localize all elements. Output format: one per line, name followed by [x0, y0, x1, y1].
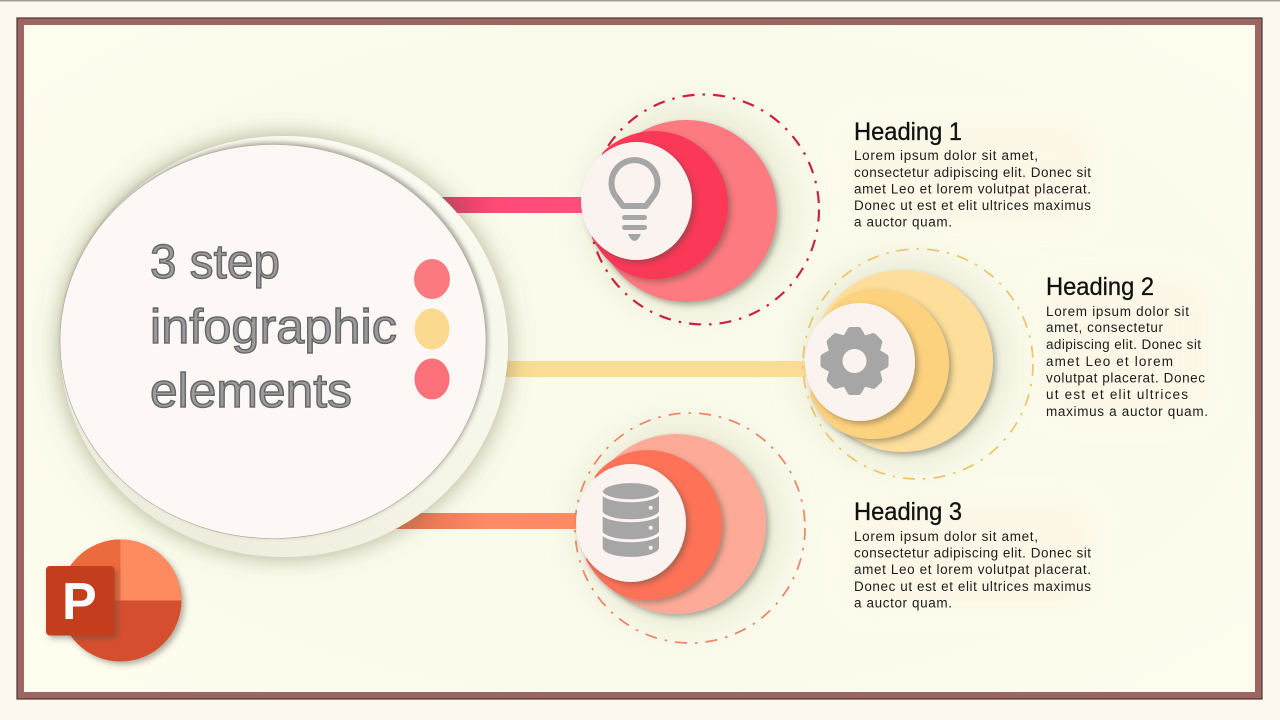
text block: heading 1: Heading 1 [854, 118, 962, 146]
icon: database [602, 483, 660, 557]
text block: heading 2: amet, consectetur [1046, 320, 1164, 335]
title: infographic [150, 301, 397, 354]
text block: heading 3 [854, 498, 1091, 610]
icon: gear [820, 327, 888, 395]
text block: heading 2: ut est et elit ultrices [1046, 387, 1188, 402]
text block: heading 1: Donec ut est et elit ultrices maximus [854, 198, 1091, 213]
text block: heading 1 [854, 118, 1091, 230]
text block: heading 3: a auctor quam. [854, 596, 952, 610]
text block: heading 1: amet Leo et lorem volutpat placerat. [854, 182, 1091, 196]
text block: heading 2: adipiscing elit. Donec sit [1046, 337, 1201, 352]
main circle [60, 136, 508, 557]
text block: heading 2: maximus a auctor quam. [1046, 404, 1208, 419]
step 1 circles [581, 94, 819, 324]
title: elements [150, 365, 352, 418]
text block: heading 3: consectetur adipiscing elit. Donec sit [854, 546, 1091, 560]
step indicator dots [414, 259, 450, 400]
icon: light bulb [612, 160, 657, 241]
text block: heading 3: Heading 3 [854, 498, 962, 526]
connector bar: pink [440, 197, 582, 213]
text block: heading 2 [1046, 273, 1208, 419]
warm glow behind text blocks [850, 125, 1205, 605]
icon: PowerPoint logo [46, 540, 182, 662]
text block: heading 1: a auctor quam. [854, 214, 952, 230]
text block: heading 2: volutpat placerat. Donec [1046, 370, 1205, 386]
text block: heading 3: Donec ut est et elit ultrices maximus [854, 579, 1091, 594]
text block: heading 2: Heading 2 [1046, 273, 1154, 301]
text block: heading 3: Lorem ipsum dolor sit amet, [854, 529, 1038, 544]
text block: heading 1: Lorem ipsum dolor sit amet, [854, 148, 1038, 163]
title: 3 step [150, 236, 280, 289]
text block: heading 2: Lorem ipsum dolor sit [1046, 304, 1189, 319]
text block: heading 2: amet Leo et lorem [1046, 354, 1173, 369]
connector bar: orange [395, 513, 579, 529]
connector bar: yellow [500, 361, 808, 377]
text block: heading 3: amet Leo et lorem volutpat placerat. [854, 562, 1091, 577]
icon: PowerPoint logo: P [62, 573, 97, 631]
title [150, 236, 397, 418]
text block: heading 1: consectetur adipiscing elit. Donec sit [854, 165, 1091, 180]
step 2 circles [803, 249, 1033, 479]
step 3 circles [575, 413, 805, 643]
soft halos behind the step circles [575, 105, 1010, 630]
